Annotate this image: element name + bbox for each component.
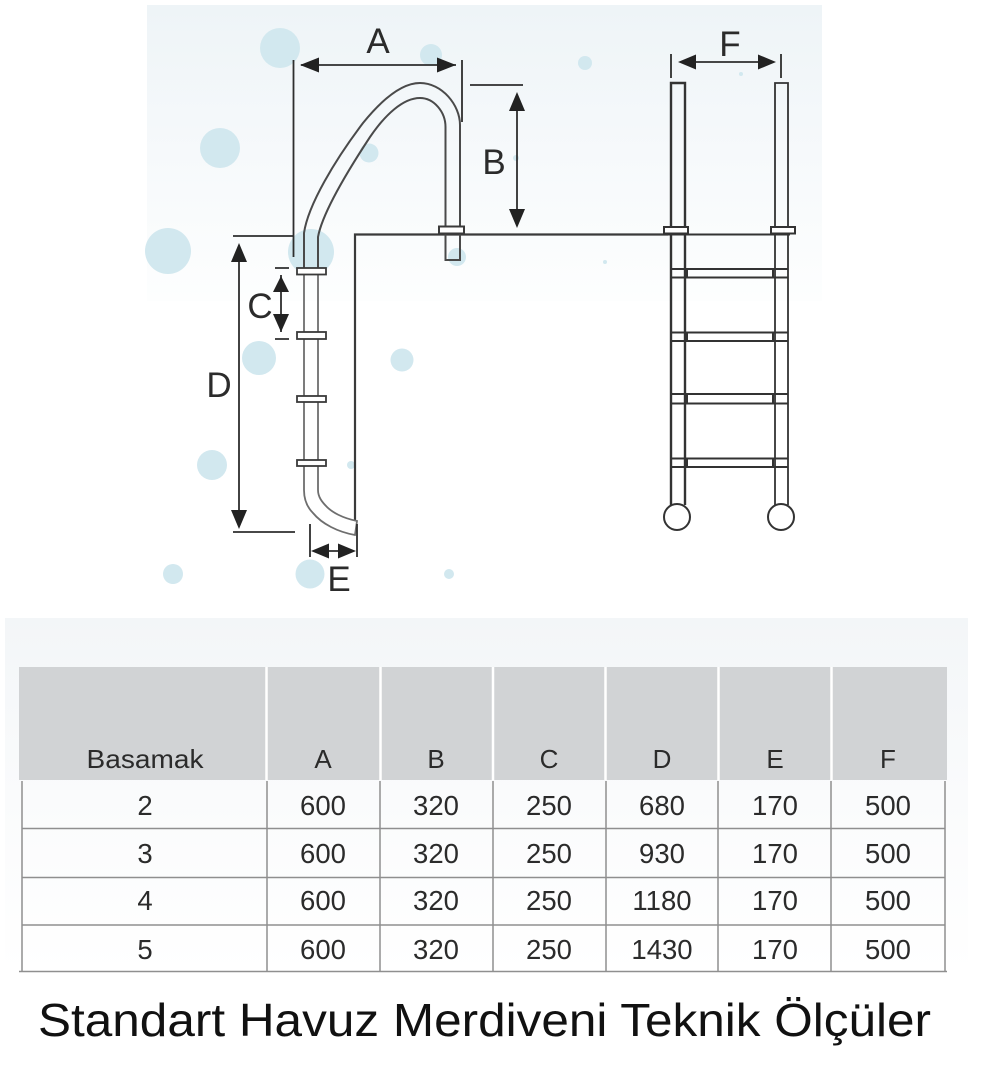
left foot: [664, 504, 690, 530]
dimension letters: [206, 22, 741, 599]
row: 5 steps: 170: [752, 934, 798, 965]
dimension letters: A: [366, 22, 390, 61]
front view treads: [672, 269, 788, 467]
side view treads: [297, 268, 326, 466]
header labels: E: [766, 744, 784, 774]
dimension letters: C: [247, 287, 273, 326]
row: 4 steps: 500: [865, 885, 911, 916]
ground line: [668, 234, 790, 236]
row: 4 steps: 170: [752, 885, 798, 916]
left post: [671, 83, 685, 505]
lower rail: [304, 274, 357, 535]
header labels: D: [653, 744, 671, 774]
flanges: [664, 227, 795, 234]
row: 5 steps: 1430: [631, 934, 693, 965]
row: 2 steps: 500: [865, 790, 911, 821]
row: 3 steps: 930: [639, 838, 685, 869]
header labels: C: [540, 744, 558, 774]
handrail outer and inner curves: [304, 83, 460, 268]
row: 4 steps: 1180: [632, 885, 692, 916]
header labels: A: [314, 744, 332, 774]
row: 4 steps: 320: [413, 885, 459, 916]
dimension table: [19, 667, 947, 972]
row: 2 steps: 2: [137, 790, 153, 821]
right foot: [768, 504, 794, 530]
row: 2 steps: [137, 790, 911, 821]
row: 3 steps: 320: [413, 838, 459, 869]
diagram background panel: [147, 5, 822, 301]
row: 2 steps: 250: [526, 790, 572, 821]
table background panel: [5, 618, 968, 973]
ladder side view: [297, 83, 668, 535]
dimension letters: B: [482, 143, 506, 182]
row: 2 steps: 600: [300, 790, 346, 821]
header labels: B: [427, 744, 445, 774]
row: 3 steps: 600: [300, 838, 346, 869]
decorative bubbles: [92, 28, 743, 900]
row: 4 steps: 250: [526, 885, 572, 916]
row: 3 steps: 250: [526, 838, 572, 869]
row: 5 steps: [137, 934, 911, 965]
row: 5 steps: 500: [865, 934, 911, 965]
header labels: [86, 744, 896, 774]
dimension lines: [233, 54, 781, 557]
row: 5 steps: 5: [137, 934, 153, 965]
row: 2 steps: 170: [752, 790, 798, 821]
row: 4 steps: 4: [137, 885, 153, 916]
table header: [19, 667, 947, 780]
dimension letters: E: [327, 560, 351, 599]
header labels: F: [880, 744, 896, 774]
row: 5 steps: 250: [526, 934, 572, 965]
row: 2 steps: 320: [413, 790, 459, 821]
row: 3 steps: 170: [752, 838, 798, 869]
right post: [775, 83, 788, 505]
row: 5 steps: 600: [300, 934, 346, 965]
pool edge line: [355, 234, 668, 521]
dimension arrowheads: [231, 54, 776, 558]
dimension letters: D: [206, 366, 232, 405]
table grid: [19, 781, 947, 972]
caption: Standart Havuz Merdiveni Teknik Ölçüler: [38, 994, 931, 1046]
deck flange: [439, 226, 464, 234]
row: 4 steps: [137, 885, 911, 916]
header separators: [266, 667, 832, 780]
row: 3 steps: [137, 838, 911, 869]
row: 4 steps: 600: [300, 885, 346, 916]
ladder front view: [664, 83, 795, 530]
row: 3 steps: 3: [137, 838, 153, 869]
dimension letters: F: [719, 25, 741, 64]
row: 3 steps: 500: [865, 838, 911, 869]
header labels: Basamak: [86, 744, 205, 774]
row: 5 steps: 320: [413, 934, 459, 965]
row: 2 steps: 680: [639, 790, 685, 821]
